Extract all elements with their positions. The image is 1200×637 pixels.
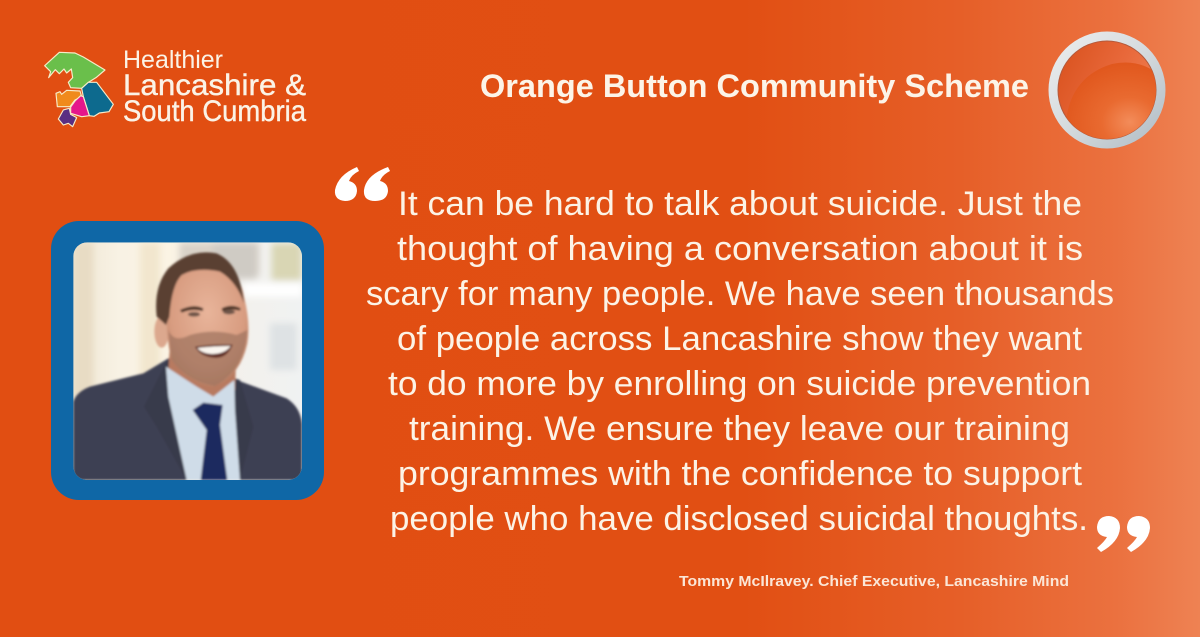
- quote: opening mark: [335, 167, 390, 201]
- photo frame: [51, 221, 324, 500]
- quote text: scary for many people. We have seen thousands: [366, 275, 1114, 313]
- icon: orange button: [1048, 32, 1166, 148]
- eyebrows: [180, 306, 203, 313]
- attribution: Tommy McIlravey. Chief Executive, Lancashire Mind: [679, 573, 1069, 590]
- hair: [156, 252, 244, 325]
- suit: [73, 358, 302, 480]
- logo: Healthier Lancashire & South Cumbria: [45, 46, 306, 128]
- shirt: [166, 367, 240, 480]
- eyes: [188, 312, 200, 317]
- lapels: [234, 378, 242, 384]
- logo wordmark: Lancashire &: [123, 69, 306, 102]
- icon: region map: [45, 52, 113, 127]
- logo wordmark: South Cumbria: [123, 95, 306, 128]
- quote text: It can be hard to talk about suicide. Just the: [398, 185, 1082, 223]
- portrait photo: [73, 242, 302, 480]
- heading: Orange Button Community Scheme: [480, 68, 1029, 104]
- quote text: training. We ensure they leave our training: [409, 410, 1070, 448]
- quote text: to do more by enrolling on suicide prevention: [388, 365, 1091, 403]
- ear: [154, 316, 169, 348]
- mouth: [195, 345, 233, 358]
- quote text: of people across Lancashire show they want: [397, 320, 1083, 358]
- logo wordmark: [123, 46, 306, 128]
- quote text: people who have disclosed suicidal thoughts.: [390, 500, 1088, 538]
- quote: closing mark: [1097, 516, 1150, 552]
- quote text: programmes with the confidence to support: [398, 455, 1083, 493]
- beard: [168, 330, 247, 386]
- face: [166, 268, 250, 370]
- quote text: thought of having a conversation about it is: [397, 230, 1083, 268]
- portrait with blue frame: [51, 221, 324, 500]
- quote text: [366, 185, 1114, 538]
- tie: [193, 403, 227, 480]
- logo wordmark: Healthier: [123, 46, 223, 74]
- neck: [166, 351, 238, 398]
